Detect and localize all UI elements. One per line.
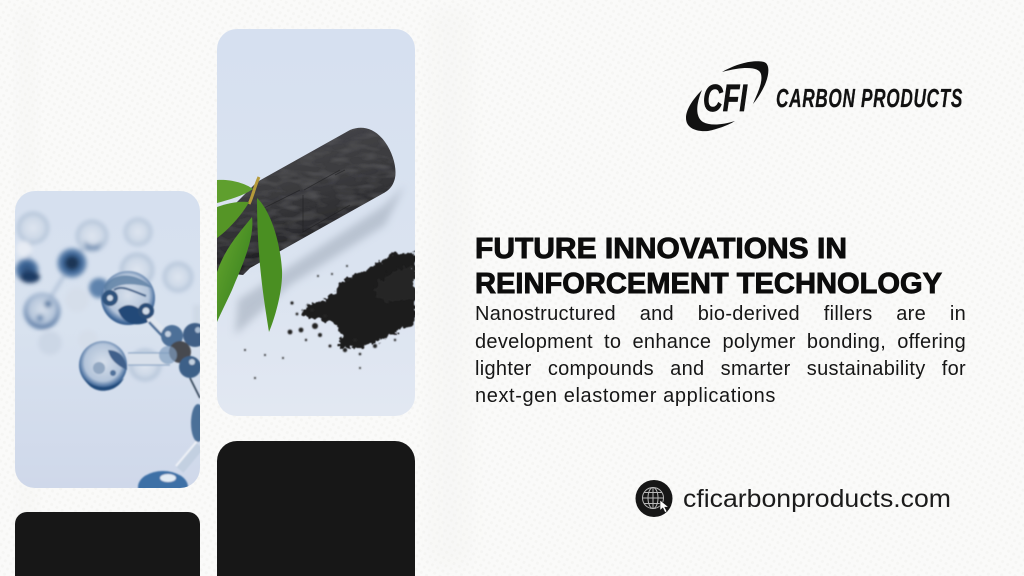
heading (475, 233, 942, 300)
body text: lighter compounds and smarter sustainability for (475, 358, 966, 380)
charcoal cracks (260, 170, 350, 232)
logo swoosh bottom (686, 90, 735, 131)
blurred background molecules (15, 212, 201, 381)
panel: black block, left column (15, 512, 200, 576)
bamboo leaves (217, 177, 282, 332)
panel: molecule photo (15, 191, 207, 503)
panel: black block, middle column (217, 441, 415, 576)
body text: Nanostructured and bio-derived fillers are in (475, 303, 966, 325)
charcoal shadow (235, 185, 405, 335)
body text: development to enhance polymer bonding, offering (475, 331, 966, 353)
logo letters CFI: CFI (703, 78, 748, 120)
heading: FUTURE INNOVATIONS IN (475, 233, 847, 265)
charcoal cylinder (217, 128, 396, 275)
heading: REINFORCEMENT TECHNOLOGY (475, 268, 942, 300)
body text: next-gen elastomer applications (475, 385, 776, 407)
website url: cficarbonproducts.com (683, 485, 951, 513)
focused molecules (78, 270, 200, 488)
logo: CFI Carbon Products (686, 61, 963, 131)
icon: globe with cursor (636, 480, 672, 517)
body text (475, 303, 966, 407)
panel: charcoal and bamboo photo (217, 29, 415, 416)
logo swoosh top (722, 61, 768, 104)
powder (244, 252, 415, 379)
